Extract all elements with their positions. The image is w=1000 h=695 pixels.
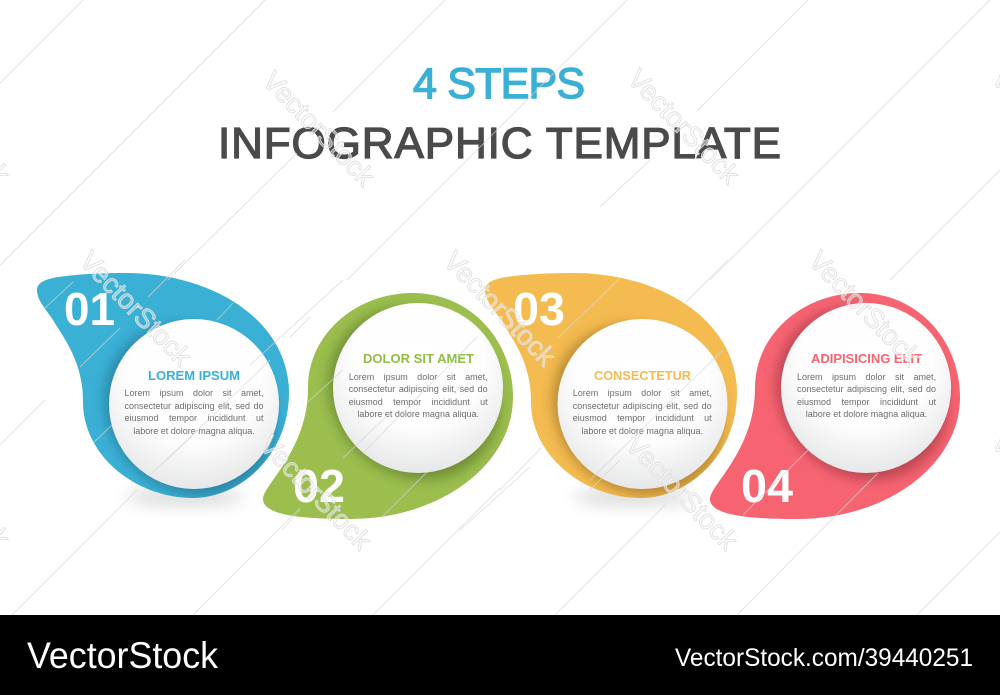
panel: step 02 — [263, 293, 513, 519]
watermarks: VectorStock — [254, 429, 378, 556]
watermarks: VectorStock — [74, 245, 198, 372]
green drop shape — [263, 293, 513, 519]
body text: labore et dolore magna aliqua. — [357, 409, 479, 419]
panel: step 03 — [485, 273, 737, 512]
white disc — [781, 303, 951, 473]
body text: consectetur adipiscing elit, sed do — [797, 384, 936, 394]
number 02: 02 — [293, 460, 345, 512]
body text: labore et dolore magna aliqua. — [133, 426, 255, 436]
blue drop shape — [37, 273, 289, 498]
watermarks: VectorStock — [438, 245, 562, 372]
body text — [797, 370, 937, 422]
heading: infographic template: INFOGRAPHIC TEMPLATE — [218, 119, 781, 168]
body text — [573, 387, 713, 439]
heading: 4 steps: 4 STEPS — [413, 60, 585, 108]
body text: consectetur adipiscing elit, sed do — [349, 384, 488, 394]
white disc — [333, 303, 503, 473]
heading: consectetur: CONSECTETUR — [594, 368, 692, 383]
heading: lorem ipsum: LOREM IPSUM — [148, 368, 240, 383]
body text: Lorem ipsum dolor sit amet, — [349, 372, 488, 382]
orange drop shape — [485, 273, 737, 498]
panel: step 01 — [37, 273, 289, 512]
red drop shape — [710, 293, 960, 519]
body text: eiusmod tempor incididunt ut — [573, 413, 712, 423]
footer link: VectorStock.com/39440251 — [675, 644, 973, 672]
title — [218, 60, 781, 168]
body text: consectetur adipiscing elit, sed do — [573, 401, 712, 411]
body text: eiusmod tempor incididunt ut — [349, 397, 488, 407]
white disc — [558, 319, 728, 489]
panel: step 04 — [710, 293, 960, 519]
heading: adipisicing elit: ADIPISICING ELIT — [811, 351, 922, 366]
body text: Lorem ipsum dolor sit amet, — [124, 388, 264, 398]
watermarks — [0, 63, 1000, 556]
watermarks: VectorStock — [257, 65, 381, 192]
body text: consectetur adipiscing elit, sed do — [124, 401, 264, 411]
watermarks: VectorStock — [622, 63, 746, 190]
body text: Lorem ipsum dolor sit amet, — [573, 388, 712, 398]
number 03: 03 — [513, 283, 565, 335]
footer brand: VectorStock — [27, 635, 218, 676]
watermarks: VectorStock — [803, 245, 927, 372]
body text: labore et dolore magna aliqua. — [806, 409, 927, 419]
body text: Lorem ipsum dolor sit amet, — [797, 372, 936, 382]
watermarks: VectorStock — [620, 429, 744, 556]
body text: eiusmod tempor incididunt ut — [797, 397, 936, 407]
number 01: 01 — [64, 283, 115, 335]
footer bar — [0, 615, 1000, 695]
body text: labore et dolore magna aliqua. — [581, 426, 703, 436]
body text: eiusmod tempor incididunt ut — [124, 413, 264, 423]
white disc — [109, 319, 279, 489]
body text — [124, 387, 264, 439]
number 04: 04 — [741, 460, 793, 512]
heading: dolor sit amet: DOLOR SIT AMET — [363, 351, 474, 366]
body text — [349, 370, 489, 422]
